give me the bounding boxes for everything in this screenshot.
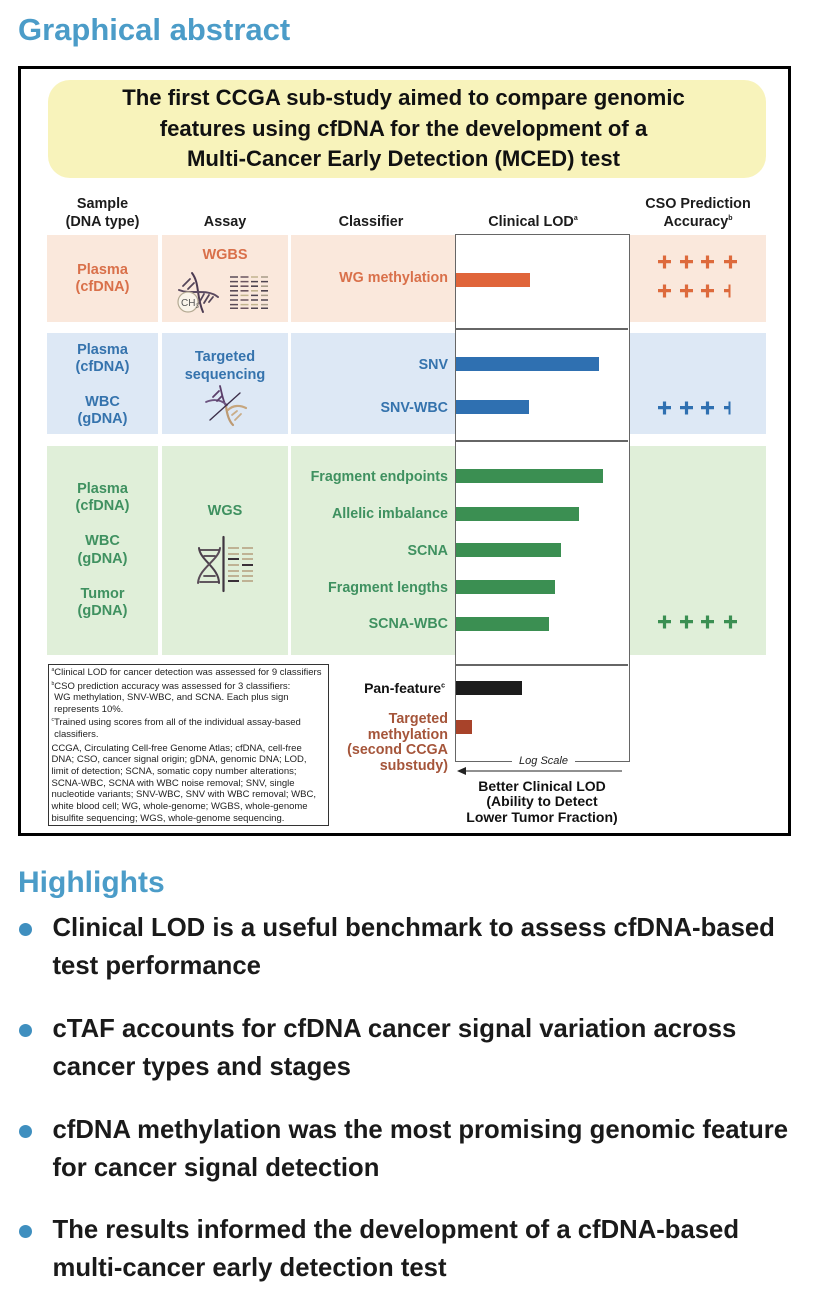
axis caption: better clinical LOD: Lower Tumor Fraction) xyxy=(466,809,618,825)
sample label: plasma xyxy=(76,262,129,295)
axis caption: better clinical LOD: (Ability to Detect xyxy=(486,793,598,809)
column heading: clinical LOD: Clinical LODa xyxy=(488,214,578,230)
highlight bullet 3: for cancer signal detection xyxy=(52,1154,379,1182)
bar: SNV xyxy=(456,357,599,371)
bar: SNV-WBC xyxy=(456,400,529,414)
sample labels: plasma and WBC: Plasma xyxy=(77,342,128,358)
classifier label: SCNA: SCNA xyxy=(407,543,448,559)
bar: SCNA xyxy=(456,543,561,557)
title text: features using cfDNA for the development of a xyxy=(160,116,647,140)
highlight bullet 1 xyxy=(19,914,775,980)
sample labels: plasma and WBC: WBC xyxy=(85,394,120,410)
column heading: classifier: Classifier xyxy=(339,214,403,230)
bar chart: clinical LOD xyxy=(455,234,630,762)
classifier label: SNV: SNV xyxy=(419,357,448,373)
highlight bullet 4 xyxy=(19,1216,739,1282)
footnotes and abbreviations box: aClinical LOD for cancer detection was assessed for 9 classifiers xyxy=(52,666,321,678)
footnotes and abbreviations box: SCNA-WBC, SCNA with WBC noise removal; SNV, single xyxy=(52,778,295,789)
title text xyxy=(122,85,685,171)
panel: graphical abstract frame xyxy=(18,66,791,836)
axis label: log scale: Log Scale xyxy=(519,755,568,767)
axis label: log scale xyxy=(512,754,575,768)
accuracy: SCNA plus signs xyxy=(658,616,737,628)
accuracy: SNV-WBC plus signs xyxy=(658,402,730,414)
classifier label: fragment endpoints: Fragment endpoints xyxy=(311,469,448,485)
sample label: plasma: Plasma xyxy=(77,262,128,278)
highlight bullet 2: cTAF accounts for cfDNA cancer signal variation across xyxy=(52,1015,736,1043)
footnotes and abbreviations box: WG methylation, SNV-WBC, and SCNA. Each plus sign xyxy=(54,692,289,703)
assay label: targeted sequencing: Targeted xyxy=(195,349,255,365)
highlight bullet 3: cfDNA methylation was the most promising genomic feature xyxy=(52,1116,788,1144)
assay label: targeted sequencing: sequencing xyxy=(185,367,265,383)
icon: methylated DNA and sequence reads: 3 xyxy=(195,304,199,310)
bar: SCNA-WBC xyxy=(456,617,549,631)
footnotes and abbreviations box xyxy=(48,664,328,826)
sample label: plasma: (cfDNA) xyxy=(76,279,129,295)
assay label: WGBS: WGBS xyxy=(202,247,248,263)
classifier label: WG methylation: WG methylation xyxy=(339,270,448,286)
footnotes and abbreviations box: CCGA, Circulating Cell-free Genome Atlas; cfDNA, cell-free xyxy=(52,742,302,754)
accuracy cell: targeted sequencing xyxy=(630,333,766,434)
highlight bullet 3 xyxy=(19,1116,788,1182)
assay cell: WGBS xyxy=(162,235,288,322)
column heading: sample xyxy=(66,196,139,230)
footnotes and abbreviations box: DNA; CSO, cancer signal origin; gDNA, genomic DNA; LOD, xyxy=(52,754,307,765)
highlight bullet 4: The results informed the development of a cfDNA-based xyxy=(52,1216,739,1244)
classifier cell: WGS xyxy=(291,446,455,655)
accuracy cell: WGBS xyxy=(630,235,766,322)
axis caption: better clinical LOD: Better Clinical LOD xyxy=(478,778,606,794)
bar: WG methylation xyxy=(456,273,530,287)
classifier label: SCNA-WBC: SCNA-WBC xyxy=(369,616,448,632)
sample labels: plasma, WBC, tumor xyxy=(76,481,129,619)
panel: targeted sequencing sample cell xyxy=(47,333,158,434)
icon: targeted sequencing DNA xyxy=(205,385,248,426)
footnotes and abbreviations box: white blood cell; WG, whole-genome; WGBS, whole-genome xyxy=(52,801,308,812)
classifier label: targeted methylation: methylation xyxy=(368,727,448,743)
bar: fragment lengths xyxy=(456,580,555,594)
column heading: sample: Sample xyxy=(77,196,128,212)
highlight bullet 1: test performance xyxy=(52,952,261,980)
sample labels: plasma and WBC: (gDNA) xyxy=(78,411,127,427)
assay label: WGS: WGS xyxy=(208,503,242,519)
panel: WGS sample cell xyxy=(47,446,158,655)
heading: graphical abstract: Graphical abstract xyxy=(18,12,290,47)
column heading: CSO prediction accuracy: CSO Prediction xyxy=(645,196,751,212)
sample labels: plasma, WBC, tumor: (cfDNA) xyxy=(76,498,129,514)
accuracy: WG methylation plus signs xyxy=(658,256,737,298)
classifier label: targeted methylation: (second CCGA xyxy=(347,742,448,758)
sample labels: plasma and WBC: (cfDNA) xyxy=(76,359,129,375)
footnotes and abbreviations box: bisulfite sequencing; WGS, whole-genome sequencing. xyxy=(52,813,284,824)
classifier label: targeted methylation xyxy=(347,711,448,774)
icon: whole genome DNA and reads xyxy=(197,536,253,592)
highlight bullet 1: Clinical LOD is a useful benchmark to assess cfDNA-based xyxy=(52,914,775,942)
sample labels: plasma, WBC, tumor: WBC xyxy=(85,533,120,549)
classifier label: fragment lengths: Fragment lengths xyxy=(328,580,448,596)
classifier cell: WGBS xyxy=(291,235,455,322)
title text: The first CCGA sub-study aimed to compare genomic xyxy=(122,85,685,110)
assay cell: targeted sequencing xyxy=(162,333,288,434)
arrow: better clinical LOD direction xyxy=(457,767,622,775)
highlight bullet 2: cancer types and stages xyxy=(52,1053,351,1081)
column heading: CSO prediction accuracy: Accuracyb xyxy=(663,214,733,230)
footnotes and abbreviations box: classifiers. xyxy=(54,729,98,740)
icon: methylated DNA and sequence reads xyxy=(177,272,268,313)
title banner xyxy=(48,80,766,178)
accuracy cell: WGS xyxy=(630,446,766,655)
footnotes and abbreviations box: limit of detection; SCNA, somatic copy number alterations; xyxy=(52,766,296,777)
bar: targeted methylation xyxy=(456,720,472,734)
highlight bullet 2 xyxy=(19,1015,736,1081)
sample labels: plasma and WBC xyxy=(76,342,129,427)
bar: fragment endpoints xyxy=(456,469,603,483)
heading: highlights: Highlights xyxy=(18,866,165,899)
column heading: CSO prediction accuracy xyxy=(645,196,751,230)
panel: WGBS sample cell xyxy=(47,235,158,322)
column heading: assay: Assay xyxy=(204,214,246,230)
footnotes and abbreviations box: bCSO prediction accuracy was assessed for 3 classifiers: xyxy=(52,680,290,692)
assay cell: WGS xyxy=(162,446,288,655)
sample labels: plasma, WBC, tumor: (gDNA) xyxy=(78,603,127,619)
bar: allelic imbalance xyxy=(456,507,579,521)
bar: pan-feature xyxy=(456,681,522,695)
axis caption: better clinical LOD xyxy=(466,778,618,825)
classifier label: pan-feature: Pan-featurec xyxy=(364,680,445,696)
classifier label: targeted methylation: Targeted xyxy=(389,711,448,727)
assay label: targeted sequencing xyxy=(185,349,265,383)
column heading: sample: (DNA type) xyxy=(66,214,139,230)
footnotes and abbreviations box: nucleotide variants; SNV-WBC, SNV with WBC removal; WBC, xyxy=(52,789,316,800)
sample labels: plasma, WBC, tumor: Tumor xyxy=(80,586,125,602)
footnotes and abbreviations box: cTrained using scores from all of the individual assay-based xyxy=(52,717,301,728)
footnotes and abbreviations box: represents 10%. xyxy=(54,704,123,715)
highlight bullet 4: multi-cancer early detection test xyxy=(52,1254,447,1282)
sample labels: plasma, WBC, tumor: (gDNA) xyxy=(78,551,127,567)
classifier label: allelic imbalance: Allelic imbalance xyxy=(332,506,448,522)
classifier label: SNV-WBC: SNV-WBC xyxy=(380,400,448,416)
classifier cell: targeted sequencing xyxy=(291,333,455,434)
sample labels: plasma, WBC, tumor: Plasma xyxy=(77,481,128,497)
title text: Multi-Cancer Early Detection (MCED) test xyxy=(187,146,620,171)
classifier label: targeted methylation: substudy) xyxy=(380,758,448,774)
icon: methylated DNA and sequence reads: CH xyxy=(181,298,195,309)
